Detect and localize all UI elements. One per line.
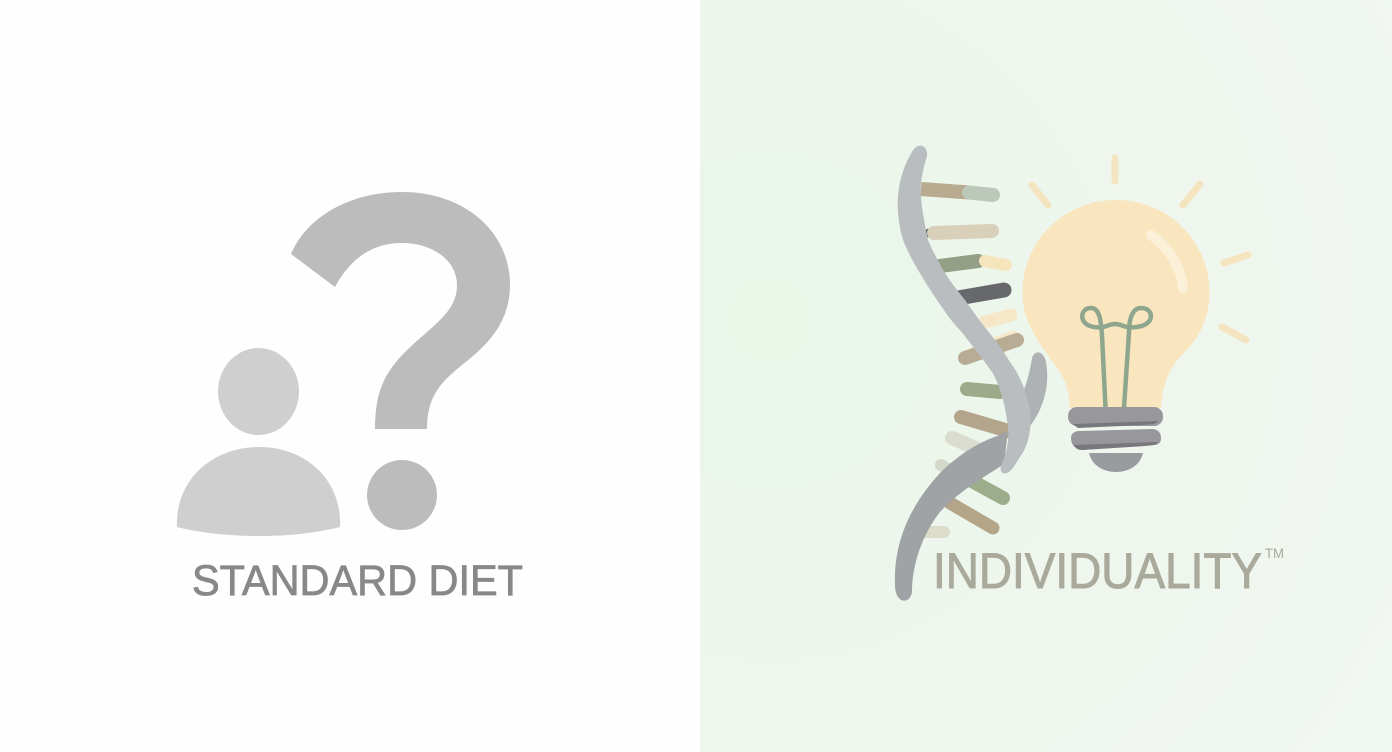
panel: standard diet xyxy=(0,0,700,752)
dna back strand xyxy=(1020,352,1047,426)
heading: individuality: INDIVIDUALITY xyxy=(933,543,1262,599)
heading: individuality: TM xyxy=(1265,545,1284,561)
panel: individuality xyxy=(700,0,1392,752)
bulb rays xyxy=(1032,158,1248,340)
icon: dna helix xyxy=(895,146,1047,601)
bulb glass xyxy=(1022,200,1210,408)
dna dark strand xyxy=(895,431,1008,601)
bulb highlight xyxy=(1151,235,1183,288)
bulb filament xyxy=(1082,308,1151,408)
dna rungs xyxy=(921,189,1017,532)
dna light strand xyxy=(898,146,1031,473)
icon: question mark xyxy=(291,192,510,530)
heading: standard diet: STANDARD DIET xyxy=(192,557,523,605)
icon: light bulb xyxy=(1022,158,1248,472)
bulb base xyxy=(1068,407,1163,472)
icon: person xyxy=(177,348,340,536)
